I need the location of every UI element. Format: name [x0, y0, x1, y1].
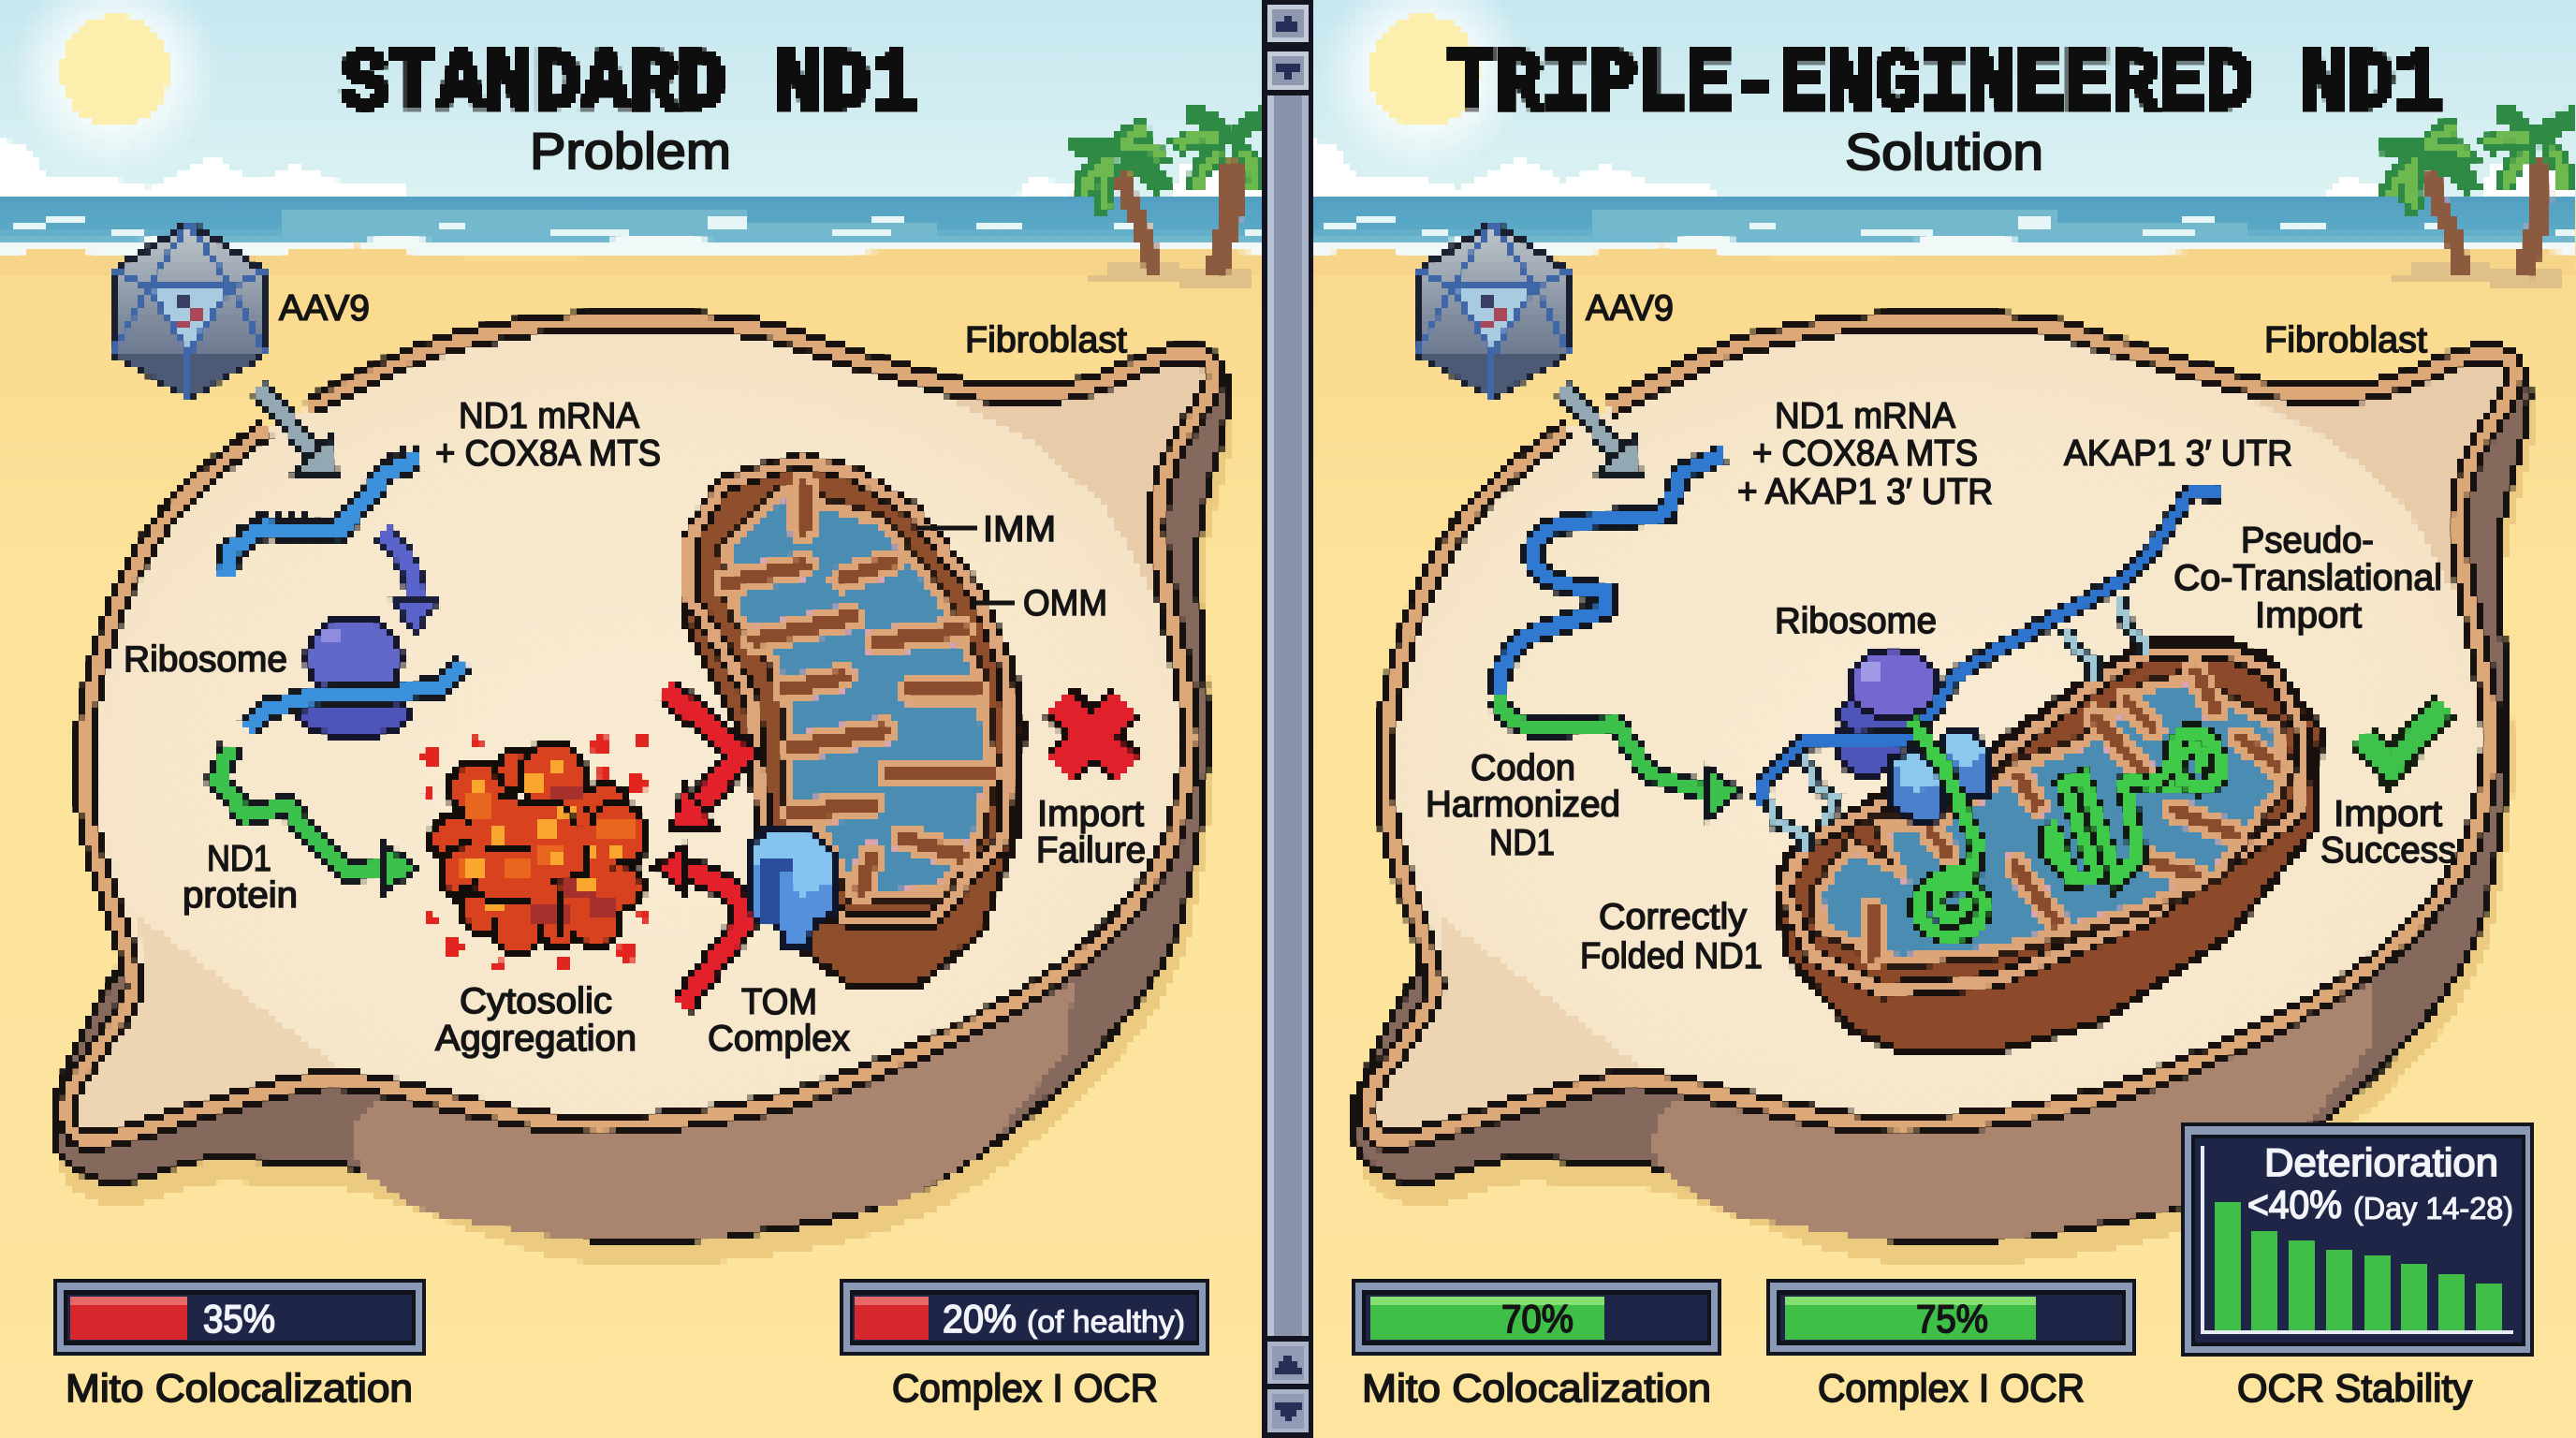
metric label: Mito Colocalization: Mito Colocalization [1362, 1366, 1711, 1410]
title: Triple-Engineered ND1: TRIPLE-ENGINEERED ND1 [1448, 36, 2442, 134]
label: ND1 mRNA + COX8A MTS + AKAP1 3' UTR: + AKAP1 3′ UTR [1737, 472, 1993, 512]
label: TOM Complex [708, 982, 850, 1059]
label: ND1 mRNA + COX8A MTS + AKAP1 3' UTR: ND1 mRNA [1775, 396, 1955, 436]
label: Codon Harmonized ND1: ND1 [1489, 823, 1555, 863]
label: ND1 protein: ND1 [207, 839, 271, 879]
label: ND1 mRNA + COX8A MTS: + COX8A MTS [435, 433, 661, 474]
arrow: mRNA to ribosome [382, 530, 438, 635]
label: AAV9: AAV9 [1586, 288, 1674, 329]
arrow: rejected import lower [653, 844, 743, 1005]
icon: mitochondrion with imported protein [1777, 639, 2320, 1052]
label: Cytosolic Aggregation [435, 981, 637, 1059]
chart panel: OCR stability deterioration [2181, 1123, 2534, 1357]
scrollbar divider [1262, 0, 1313, 1438]
label: AAV9: AAV9 [279, 288, 370, 329]
label: AKAP1 3' UTR: AKAP1 3′ UTR [2064, 433, 2292, 474]
scroll button: up [1267, 5, 1309, 42]
icon: TOM complex cylinders [1893, 728, 1988, 822]
progress bar: complex I OCR 75%: 75% [1916, 1297, 1988, 1341]
metric label: Complex I OCR: Complex I OCR [1818, 1366, 2085, 1410]
label: ND1 mRNA + COX8A MTS + AKAP1 3' UTR: + COX8A MTS [1752, 433, 1978, 474]
label: Ribosome: Ribosome [1775, 601, 1937, 641]
label: Import Failure: Import [1037, 794, 1144, 834]
tethers between mRNA and mitochondrion [1768, 599, 2144, 854]
panel: triple-engineered ND1 (solution) [1309, 0, 2576, 1410]
metric label: OCR Stability: OCR Stability [2237, 1366, 2472, 1410]
progress bar: complex I OCR 20%: 20% [943, 1297, 1017, 1341]
label: Fibroblast: Fibroblast [2264, 320, 2427, 360]
scroll button: down (bottom) [1267, 1389, 1309, 1432]
chart text: day range: (Day 14-28) [2353, 1191, 2513, 1225]
label: Pseudo-Co-Translational Import: Co-Translational [2174, 558, 2442, 598]
fibroblast cell [53, 321, 1234, 1266]
correctly folded ND1 strand and coils [1910, 720, 2220, 936]
label: OMM: OMM [1023, 583, 1107, 624]
label: Ribosome: Ribosome [124, 639, 287, 680]
progress bar: mito colocalization 70% [1352, 1279, 1721, 1356]
scroll button: up (bottom) [1267, 1342, 1309, 1384]
icon: ribosome with translating mRNA [245, 617, 465, 738]
AKAP1 3' UTR mRNA strand [1760, 492, 2220, 804]
label: Import Failure: Failure [1036, 830, 1146, 871]
aggregate debris dots [421, 733, 651, 973]
metric label: Mito Colocalization: Mito Colocalization [66, 1366, 413, 1410]
label: TOM Complex: TOM [741, 982, 817, 1022]
scroll button: down [1267, 51, 1309, 90]
label: Correctly Folded ND1 [1580, 897, 1763, 976]
progress bar: mito colocalization 35%: 35% [203, 1297, 275, 1341]
ND1 mRNA strand [226, 448, 418, 576]
chart text: Deterioration: Deterioration [2264, 1140, 2498, 1184]
icon: green check [2363, 704, 2445, 768]
scrollbar thumb [1267, 95, 1309, 1336]
arrow: ND1 protein [218, 746, 417, 895]
progress bar: complex I OCR 20%: (of healthy) [1027, 1304, 1185, 1339]
label: Cytosolic Aggregation: Cytosolic [460, 981, 612, 1021]
label: Import Success: Import [2334, 794, 2442, 834]
label: Codon Harmonized ND1 [1426, 748, 1620, 863]
label: Correctly Folded ND1: Folded ND1 [1580, 936, 1763, 976]
label: ND1 mRNA + COX8A MTS [435, 396, 661, 474]
label: Pseudo-Co-Translational Import: Import [2255, 595, 2362, 636]
label: Import Success: Success [2320, 830, 2456, 871]
arrow: rejected import upper [666, 689, 742, 829]
ND1 mRNA strand [1498, 454, 1723, 697]
icon: cytosolic aggregate [431, 742, 648, 954]
label: Import Failure [1036, 794, 1146, 871]
beach scenery with sun, clouds, sea and palm trees [1309, 0, 2576, 289]
label: Codon Harmonized ND1: Harmonized [1426, 785, 1620, 825]
label: Import Success [2320, 794, 2456, 871]
progress bar: mito colocalization 35% [53, 1279, 426, 1356]
illustration: left panel scene [0, 0, 1273, 1266]
label: IMM: IMM [983, 509, 1056, 550]
fibroblast cell [1354, 321, 2535, 1266]
label: Pseudo-Co-Translational Import: Pseudo- [2241, 521, 2374, 561]
label: Codon Harmonized ND1: Codon [1471, 748, 1575, 788]
metric label: Complex I OCR: Complex I OCR [892, 1366, 1158, 1410]
subtitle: Solution: Solution [1845, 123, 2043, 181]
label: Fibroblast: Fibroblast [965, 320, 1127, 360]
title: Standard ND1: STANDARD ND1 [341, 36, 918, 134]
illustration: right panel scene [1309, 0, 2576, 1266]
icon: red X [1060, 702, 1127, 769]
icon: TOM complex [749, 827, 835, 947]
icon: ribosome [1836, 649, 1938, 776]
chart text: under 40 percent: <40% [2247, 1182, 2342, 1226]
panel: standard ND1 (problem) [0, 0, 1273, 1410]
label: ND1 mRNA + COX8A MTS + AKAP1 3' UTR [1737, 396, 1993, 512]
beach scenery with sun, clouds, sea and palm trees [0, 0, 1273, 289]
label: Cytosolic Aggregation: Aggregation [435, 1019, 637, 1059]
icon: mitochondrion [684, 454, 1023, 985]
progress bar: complex I OCR 75% [1766, 1279, 2136, 1356]
bar series declining over time [2215, 1202, 2502, 1330]
icon: AAV9 capsid and entry arrow [1417, 223, 1639, 475]
label: ND1 mRNA + COX8A MTS: ND1 mRNA [459, 396, 639, 436]
leader lines for IMM and OMM [916, 528, 1015, 603]
label: Correctly Folded ND1: Correctly [1599, 897, 1747, 937]
progress bar: complex I OCR 20% [840, 1279, 1209, 1356]
label: TOM Complex: Complex [708, 1019, 850, 1059]
chart axes [2203, 1146, 2513, 1332]
label: ND1 protein: protein [183, 875, 298, 916]
icon: AAV9 capsid and entry arrow [113, 223, 335, 475]
arrow: codon harmonized ND1 [1498, 697, 1741, 820]
progress bar: mito colocalization 70%: 70% [1501, 1297, 1573, 1341]
subtitle: Problem: Problem [530, 122, 731, 180]
label: Pseudo-Co-Translational Import [2174, 521, 2442, 636]
label: ND1 protein [183, 839, 298, 916]
